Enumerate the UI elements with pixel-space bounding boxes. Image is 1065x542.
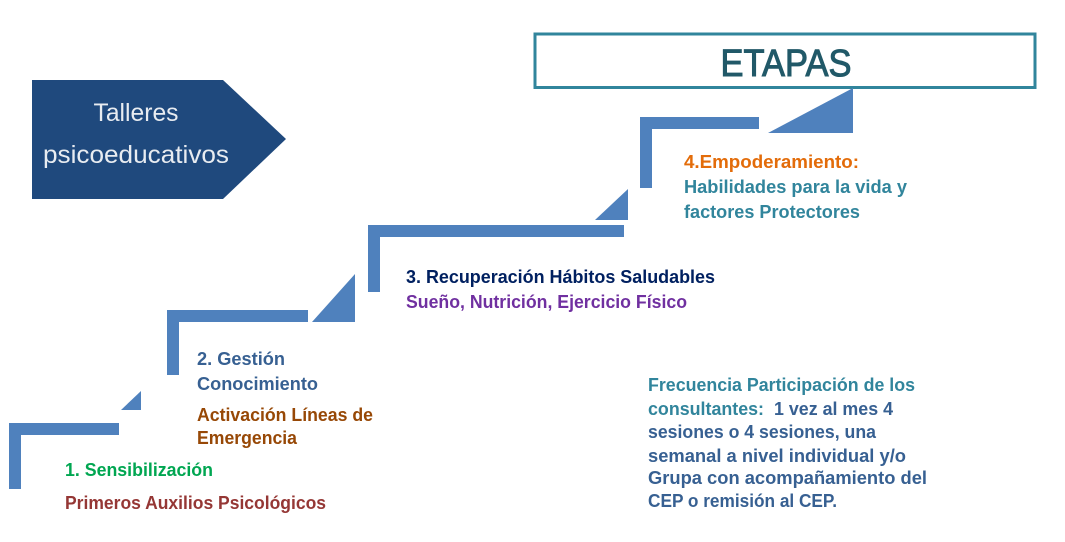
- text: stage 1: [65, 459, 326, 513]
- arrow panel: Talleres psicoeducativos: [32, 80, 286, 199]
- text: stage 1: Primeros Auxilios Psicológicos: [65, 492, 326, 513]
- stair step 2: [167, 310, 308, 375]
- text: stage 2: Emergencia: [197, 427, 298, 448]
- arrow panel: Talleres psicoeducativos: Talleres: [94, 99, 178, 127]
- arrow panel: Talleres psicoeducativos: psicoeducativos: [43, 141, 229, 169]
- text: stage 3: [406, 266, 715, 312]
- text: stage 3: Sueño, Nutrición, Ejercicio Físico: [406, 291, 687, 312]
- text: participation frequency: semanal a nivel individual y/o: [648, 445, 906, 466]
- text: participation frequency: consultantes:: [648, 398, 764, 419]
- title box: ETAPAS: [535, 34, 1035, 88]
- text: participation frequency: Grupa con acompañamiento del: [648, 467, 927, 488]
- triangle 4: [768, 88, 853, 133]
- triangle 1: [121, 391, 141, 410]
- triangle 2: [312, 274, 355, 322]
- text: stage 2: [197, 348, 373, 448]
- stair step 3: [368, 225, 624, 292]
- text: stage 2: 2. Gestión: [197, 348, 285, 369]
- text: stage 1: 1. Sensibilización: [65, 459, 213, 480]
- text: participation frequency: CEP o remisión al CEP.: [648, 490, 837, 511]
- stair step 4: [640, 117, 759, 188]
- text: participation frequency: Frecuencia Participación de los: [648, 374, 915, 395]
- text: stage 4: 4.Empoderamiento:: [684, 151, 859, 172]
- text: participation frequency: [648, 374, 927, 511]
- text: stage 4: Habilidades para la vida y: [684, 176, 908, 197]
- text: participation frequency: sesiones o 4 sesiones, una: [648, 421, 877, 442]
- text: stage 4: [684, 151, 908, 222]
- title box: ETAPAS: ETAPAS: [720, 43, 852, 85]
- triangle 3: [595, 189, 628, 220]
- text: stage 2: Activación Líneas de: [197, 404, 373, 425]
- text: participation frequency: 1 vez al mes 4: [774, 398, 894, 419]
- text: stage 3: 3. Recuperación Hábitos Saludables: [406, 266, 715, 287]
- text: stage 4: factores Protectores: [684, 201, 860, 222]
- stair step 1: [9, 423, 119, 489]
- text: stage 2: Conocimiento: [197, 373, 318, 394]
